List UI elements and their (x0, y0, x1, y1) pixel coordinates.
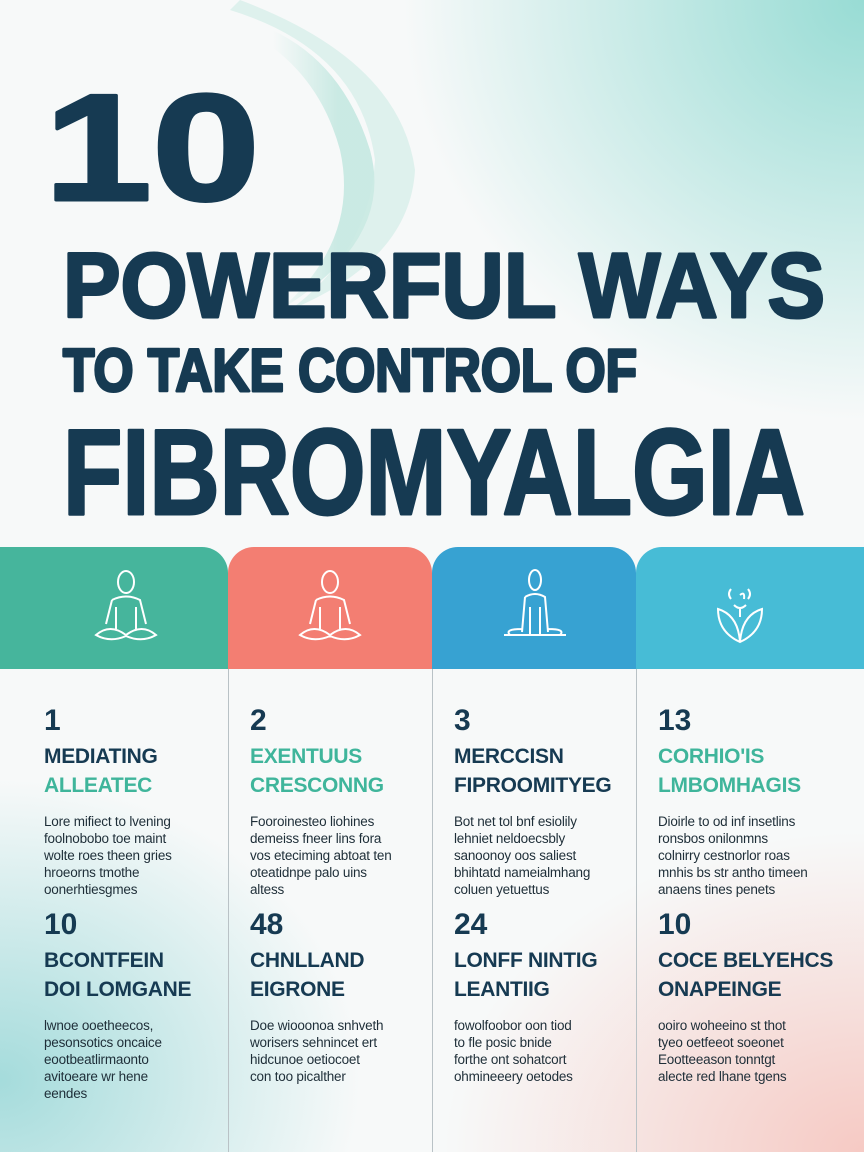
card 3: Bot net tol bnf esiolily (454, 814, 577, 829)
card 6: Doe wiooonoa snhveth (250, 1018, 383, 1033)
title (44, 63, 825, 540)
card 3: coluen yetuettus (454, 882, 549, 897)
card 5: BCONTFEIN (44, 949, 164, 972)
tab 2 (228, 547, 432, 669)
card 7: fowolfoobor oon tiod (454, 1018, 572, 1033)
card 8 (658, 908, 833, 1084)
card 4: ronsbos onilonmns (658, 831, 768, 846)
card 6: hidcunoe oetiocoet (250, 1052, 360, 1067)
card 1 (44, 704, 172, 897)
card 2: EXENTUUS (250, 745, 362, 768)
card 7: LEANTIIG (454, 978, 550, 1001)
card 7 (454, 908, 597, 1084)
card 1: foolnobobo toe maint (44, 831, 166, 846)
card 8: alecte red lhane tgens (658, 1069, 786, 1084)
card 1: Lore mifiect to lvening (44, 814, 171, 829)
card 4: colnirry cestnorlor roas (658, 848, 790, 863)
card 7: forthe ont sohatcort (454, 1052, 566, 1067)
card 5: lwnoe ooetheecos, (44, 1018, 153, 1033)
card 5 (44, 908, 191, 1101)
card 4: LMBOMHAGIS (658, 774, 801, 797)
card 3 (454, 704, 611, 897)
card 5: eendes (44, 1086, 87, 1101)
card 6: 48 (250, 908, 283, 941)
card 7: LONFF NINTIG (454, 949, 597, 972)
card 4: mnhis bs str antho timeen (658, 865, 808, 880)
card 6: CHNLLAND (250, 949, 364, 972)
card 7: to fle posic bnide (454, 1035, 552, 1050)
card 6: worisers sehnincet ert (250, 1035, 377, 1050)
card 6: EIGRONE (250, 978, 345, 1001)
card 7: 24 (454, 908, 487, 941)
card 2: oteatidnpe palo uins (250, 865, 367, 880)
card 3: sanoonoy oos saliest (454, 848, 576, 863)
card 1: 1 (44, 704, 61, 737)
card 7: ohmineeery oetodes (454, 1069, 573, 1084)
card 2: Fooroinesteo liohines (250, 814, 374, 829)
card 6 (250, 908, 383, 1084)
card 2: 2 (250, 704, 267, 737)
card 4: anaens tines penets (658, 882, 775, 897)
tab 1 (0, 547, 228, 669)
title: TO TAKE CONTROL OF (63, 337, 637, 404)
card 3: FIPROOMITYEG (454, 774, 611, 797)
card 1: hroeorns tmothe (44, 865, 139, 880)
card 4: Dioirle to od inf insetlins (658, 814, 795, 829)
card 5: pesonsotics oncaice (44, 1035, 162, 1050)
card 4: CORHIO'IS (658, 745, 764, 768)
card 5: avitoeare wr hene (44, 1069, 148, 1084)
card 8: ooiro woheeino st thot (658, 1018, 786, 1033)
card 8: 10 (658, 908, 691, 941)
tab 4 (636, 547, 864, 669)
card 6: con too picalther (250, 1069, 346, 1084)
card 8: ONAPEINGE (658, 978, 781, 1001)
card 1: MEDIATING (44, 745, 158, 768)
card 5: DOI LOMGANE (44, 978, 191, 1001)
card 8: Eootteeason tonntgt (658, 1052, 775, 1067)
card 3: bhihtatd nameialmhang (454, 865, 590, 880)
card 4 (658, 704, 808, 897)
icons (94, 569, 763, 644)
card 3: 3 (454, 704, 471, 737)
card 8: tyeo oetfeeot soeonet (658, 1035, 784, 1050)
card 1: oonerhtiesgmes (44, 882, 137, 897)
card 2: altess (250, 882, 284, 897)
column dividers (228, 669, 229, 1152)
card 3: MERCCISN (454, 745, 564, 768)
card 1: wolte roes theen gries (44, 848, 172, 863)
card 4: 13 (658, 704, 691, 737)
card 8: COCE BELYEHCS (658, 949, 833, 972)
card 2: vos eteciming abtoat ten (250, 848, 392, 863)
card 2 (250, 704, 392, 897)
tab 3 (432, 547, 636, 669)
decorative arc (230, 0, 415, 306)
card 3: lehniet neldoecsbly (454, 831, 565, 846)
title: 10 (44, 63, 260, 233)
card 5: eootbeatlirmaonto (44, 1052, 149, 1067)
card 2: CRESCONNG (250, 774, 384, 797)
card 2: demeiss fneer lins fora (250, 831, 381, 846)
card 1: ALLEATEC (44, 774, 152, 797)
title: POWERFUL WAYS (63, 235, 825, 337)
card 5: 10 (44, 908, 77, 941)
